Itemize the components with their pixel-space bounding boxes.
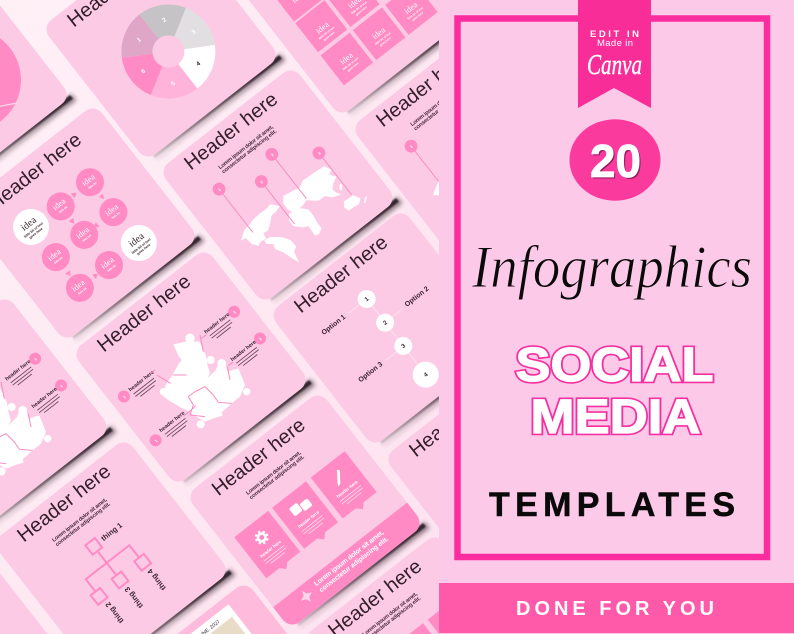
flow circles: little bit [53,256,64,265]
panel: flow chart card [0,436,236,634]
callouts: 1 [122,394,127,400]
heading: Header here [372,45,474,132]
wheel chart: 4 [196,61,203,68]
flow circles: little bit [106,264,117,273]
callouts: header here [230,339,258,363]
option steps: Option 3 [357,361,384,384]
panel: idea grid card [236,0,480,122]
flow circles: little bit [58,205,68,214]
idea tiles: little bit of text [350,0,368,15]
banner: consectetur adipiscing elit. [318,536,390,594]
idea tiles: goes here [355,5,368,17]
banner [273,503,424,629]
number badge [570,119,660,201]
icon: gear [253,529,270,546]
title: Social Media: MEDIA [530,391,700,444]
idea tiles: little bit of text [318,25,335,40]
flow circles: idea [127,230,147,250]
panel: center puzzle card [72,246,316,491]
idea tiles: little bit of text [342,56,359,71]
panel: partial map card [351,23,589,261]
icon box tops [389,593,494,634]
panel: options card [269,207,513,452]
puzzle pieces [157,334,250,428]
callouts: 1 [232,309,237,315]
panel: far right card [384,353,622,591]
callouts: 1 [33,356,38,362]
subheading: consectetur adipiscing elit. [55,501,112,548]
heading: Header here [93,270,195,357]
footer banner: DONE FOR YOU [516,598,714,620]
heading: Header here [290,231,392,318]
option steps: 4 [423,372,430,379]
idea tiles [271,0,438,85]
map pins: 3 [270,152,275,157]
flow circles: little bit [82,233,92,243]
icon box 1: header here [259,539,283,559]
panel: photo card [112,581,350,634]
icon box 3 [311,451,380,522]
tree labels: thing 1 [99,521,124,543]
heading: Header here [405,375,507,462]
callouts: header here [158,410,186,434]
number badge: 20 [590,135,641,187]
subheading: Lorem ipsum dolor sit amet, [218,124,275,171]
flow circles: idea [19,214,39,234]
number badge: 20 [592,136,642,188]
panel: bottom right card [303,533,541,634]
panel: right cover [439,0,794,634]
flow circles: goes here [28,227,44,240]
flow circles: goes here [136,243,151,256]
flow circles: idea [50,196,68,212]
tree labels [68,521,169,625]
puzzle pieces [0,381,51,475]
idea tiles: goes here [347,61,360,72]
icon box 1 [234,511,303,582]
idea tiles: little bit of text [374,31,392,46]
callouts: 1 [59,383,64,388]
flow circles: little bit [111,211,121,220]
wheel chart: 3 [191,29,198,36]
idea tiles: idea [370,25,387,41]
ribbon badge: EDIT IN [590,29,639,40]
idea tiles: goes here [323,30,336,42]
footer banner [439,583,794,633]
icon: speech bubbles [289,496,313,518]
flow circles: little bit [77,286,88,296]
flow circles [6,156,164,314]
ribbon badge [578,0,651,108]
wheel chart: 1 [136,37,143,44]
heading: Header here [180,88,282,175]
ribbon badge: Made in [597,38,633,49]
idea tiles: idea [314,19,331,36]
tree diagram [64,520,151,605]
title: Social Media: MEDIA [530,391,700,444]
tree labels: thing 2 [103,600,126,625]
option steps: 2 [383,320,389,327]
panel: circle flow card [0,102,205,347]
callouts: header here [128,370,156,393]
icon box 2: header here [297,509,320,529]
callouts: 1 [258,336,263,341]
option steps: Option 1 [320,314,347,337]
panel: left puzzle card [0,293,117,538]
callouts: header here [203,312,231,335]
pie chart [0,7,42,153]
icon box 3: header here [336,479,359,499]
title: Templates: TEMPLATES [489,486,735,524]
subheading: Lorem ipsum dolor sit amet, [245,450,303,497]
map pin [397,136,454,200]
flow circles: idea [99,254,116,271]
banner: Lorem ipsum dolor sit amet, [313,529,385,588]
title: Infographics: Infographics [471,234,752,300]
option steps: 3 [401,343,408,350]
subheading: consectetur adipiscing elit. [221,128,279,175]
callouts [114,300,279,450]
subheading: consectetur adipiscing elit. [249,454,306,501]
tree labels: thing 3 [123,585,145,610]
title: Social Media: SOCIAL [516,339,714,392]
heading: Header here [13,460,115,547]
callouts: header here [4,359,32,382]
wheel chart: 5 [170,80,177,88]
panel: icon boxes card [186,389,430,634]
icon: sparkle [297,587,316,606]
map pins [210,118,357,261]
map pins: 4 [317,150,322,156]
flow circles: little bit of text [23,221,45,239]
callouts: header here [31,386,59,410]
icon: pencil [330,469,347,486]
idea tiles: goes here [379,36,392,47]
panel: world map card [159,64,418,329]
frame border [458,18,767,557]
flow circles: little bit of text [131,237,152,255]
ribbon badge: Canva [587,49,642,81]
idea tiles: idea [338,50,355,66]
flow circles: idea [103,201,120,218]
panel: bottom left card [0,527,68,634]
panel: pie chart card [0,0,77,206]
wheel chart [102,0,234,117]
heading: Header here [208,414,310,500]
subheading: Lorem ipsum dolor sit amet, [410,81,467,128]
subheading: Lorem ipsum dolor sit amet, [51,497,109,544]
callouts [3,348,73,419]
option steps [317,258,477,420]
map pin: 1 [409,143,414,149]
map pins: 2 [259,179,265,185]
flow circles: idea [45,246,63,263]
flow circles: idea [74,224,91,241]
title: Social Media [516,339,714,444]
tree labels: thing 4 [145,567,168,592]
panel: wheel chart card [42,0,286,166]
wheel chart: 6 [141,68,147,75]
idea tiles: goes here [411,10,424,22]
idea tiles: little bit of text [406,6,424,21]
map pins: 1 [217,186,222,192]
wheel chart: 2 [162,17,168,24]
subheading: consectetur adipiscing elit. [413,85,471,132]
mockup background [0,0,440,634]
flow circles: little bit [87,181,98,190]
flow circles: idea [69,277,87,294]
world map [241,166,367,262]
title: Social Media: SOCIAL [516,339,714,392]
photo frame [136,604,302,634]
option steps: 1 [364,296,371,303]
flow circles: idea [79,171,97,188]
option steps: Option 2 [404,285,431,309]
icon box 2 [272,481,341,553]
callouts: 1 [154,438,159,443]
